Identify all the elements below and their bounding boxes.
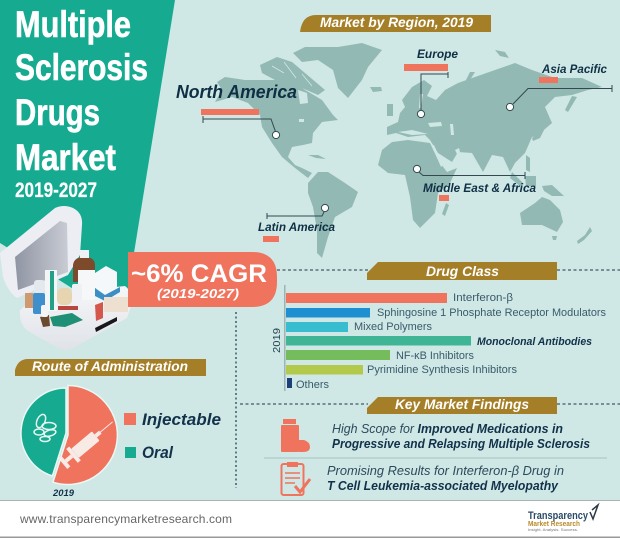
legend: route of administration: Oral <box>142 443 174 462</box>
white vial <box>41 305 48 317</box>
orange pack <box>25 293 33 308</box>
green pack <box>50 313 83 327</box>
finding: interferon results: Promising Results for Interferon-β Drug in <box>327 464 564 478</box>
bar: mixed polymers: Mixed Polymers <box>354 321 432 333</box>
south america <box>308 172 358 258</box>
bar chart: drug class <box>271 285 606 391</box>
bar: nf-kb inhibitors <box>286 350 474 362</box>
bar: monoclonal antibodies: Monoclonal Antibodies <box>477 336 592 348</box>
logo <box>528 505 598 532</box>
y axis <box>284 285 286 391</box>
cuba <box>308 155 326 159</box>
bar: sphingosine: Sphingosine 1 Phosphate Receptor Modulators <box>377 307 606 319</box>
novaya zemlya <box>466 72 475 80</box>
madagascar <box>442 203 449 216</box>
title: 2019-2027 <box>15 179 97 202</box>
heading: route of administration: Route of Administration <box>32 358 188 374</box>
region: north america: North America <box>176 82 297 102</box>
dividers <box>240 270 620 404</box>
heading: drug class: Drug Class <box>426 263 499 279</box>
region: asia pacific: Asia Pacific <box>541 62 607 76</box>
finding: improved medications: Progressive and Relapsing Multiple Sclerosis <box>332 437 590 451</box>
bar: pyrimidine synthesis inhibitors <box>286 364 517 376</box>
callout: cagr <box>128 252 277 307</box>
bar: pyrimidine synthesis inhibitors: Pyrimidine Synthesis Inhibitors <box>367 364 517 376</box>
tasmania <box>552 236 557 240</box>
north america <box>215 77 338 178</box>
heading: key market findings: Key Market Findings <box>395 396 529 412</box>
bar: interferon <box>286 292 513 304</box>
legend: route of administration <box>124 410 221 462</box>
region: europe: Europe <box>417 47 458 61</box>
finding: interferon results <box>327 464 564 493</box>
finding: improved medications <box>332 422 590 451</box>
title <box>15 4 148 202</box>
pie chart: route of administration: 2019 <box>52 488 74 498</box>
bar: others: Others <box>296 379 329 391</box>
eurasia <box>387 63 602 172</box>
kit lid <box>0 206 82 298</box>
bar: mixed polymers <box>286 321 432 333</box>
callout: cagr: (2019-2027) <box>157 286 239 301</box>
finding: improved medications: High Scope for Improved Medications in <box>332 422 563 436</box>
slice: injectable <box>53 386 117 484</box>
title: Multiple <box>15 4 131 45</box>
region: latin america: Latin America <box>258 220 335 234</box>
philippines <box>526 155 530 172</box>
bar: monoclonal antibodies <box>286 336 592 348</box>
labelled pack <box>104 297 128 312</box>
title: Sclerosis <box>15 47 148 88</box>
icon: clipboard check <box>282 462 310 495</box>
heading: market by region: Market by Region, 2019 <box>320 14 473 30</box>
heading: drug class <box>367 262 557 280</box>
website url: www.transparencymarketresearch.com <box>19 512 232 526</box>
region: latin america <box>258 204 335 242</box>
title: Market <box>15 137 116 178</box>
white carton <box>95 266 117 295</box>
region: north america <box>176 82 297 139</box>
iceland <box>370 87 382 92</box>
japan <box>532 122 546 141</box>
icon: pills <box>34 413 57 442</box>
heading: key market findings <box>367 396 557 414</box>
arctic islands <box>260 57 325 95</box>
title: Drugs <box>15 92 100 133</box>
finding: interferon results: T Cell Leukemia-associated Myelopathy <box>327 479 559 493</box>
kit base <box>20 286 132 350</box>
white cylinder <box>78 270 95 300</box>
greenland <box>293 43 382 98</box>
icon: syringe <box>57 415 118 471</box>
region: middle east and africa: Middle East & Africa <box>423 181 536 195</box>
vial with blue label <box>34 280 45 293</box>
black strip <box>95 317 117 332</box>
callout: cagr: ~6% CAGR <box>131 260 267 288</box>
kamchatka <box>565 96 577 112</box>
tall white and green box <box>45 270 57 311</box>
new zealand <box>577 227 592 244</box>
icon: medicine kit <box>0 206 132 350</box>
region: middle east and africa <box>413 165 536 201</box>
gold bottle <box>57 288 72 305</box>
region: europe <box>404 47 458 118</box>
red stripes <box>95 302 103 321</box>
footer <box>0 500 620 538</box>
brown pack <box>40 315 50 327</box>
brown jar <box>73 257 95 282</box>
y axis label: 2019 <box>271 328 283 353</box>
legend: route of administration: Injectable <box>142 410 221 429</box>
africa <box>378 140 457 228</box>
world map <box>215 43 602 258</box>
white bottle <box>72 284 82 307</box>
british isles <box>387 104 393 116</box>
teal title panel <box>0 0 175 290</box>
bar: interferon: Interferon-β <box>453 292 513 304</box>
blue box <box>95 287 120 301</box>
red cap <box>58 306 78 310</box>
pie chart: route of administration <box>21 386 118 498</box>
logo: Insight. Analysis. Success. <box>528 528 578 532</box>
icon: medicine bottle <box>281 419 310 452</box>
inland seas <box>272 62 460 167</box>
region: asia pacific <box>506 62 612 111</box>
logo: Market Research <box>528 521 580 528</box>
svalbard <box>495 50 509 58</box>
bar: nf-kb inhibitors: NF-κB Inhibitors <box>396 350 474 362</box>
kit lid inner <box>15 221 68 290</box>
indonesia <box>510 172 524 186</box>
slice: oral <box>21 388 66 476</box>
australia <box>520 197 563 232</box>
logo: Transparency <box>528 510 589 522</box>
